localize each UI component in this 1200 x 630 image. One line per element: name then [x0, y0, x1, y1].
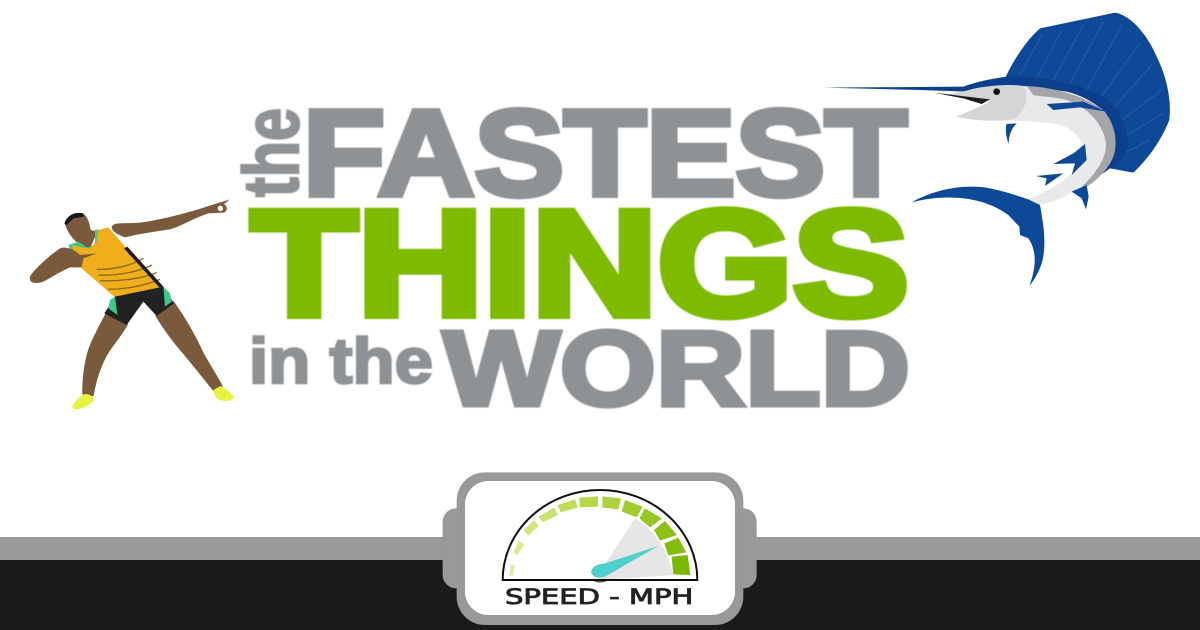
speedometer badge [443, 472, 757, 625]
fish head [943, 85, 1026, 121]
fish fins [1047, 102, 1107, 112]
gauge dial [503, 490, 697, 583]
fish body [1007, 86, 1110, 205]
title word: FASTEST: FASTEST [303, 85, 907, 221]
fish gray stripe [1027, 86, 1116, 192]
fish back band and bill [823, 77, 1128, 177]
fish sail [1005, 13, 1170, 173]
title word: the: the [227, 108, 315, 197]
title word: WORLD: WORLD [443, 310, 910, 428]
gauge needle [591, 546, 658, 578]
badge inner panel [465, 481, 735, 615]
gauge label: SPEED - MPH [505, 585, 693, 610]
footer band [0, 537, 1200, 630]
title word: THINGS: THINGS [251, 179, 909, 347]
badge frame [457, 472, 743, 625]
icon: sprinter [30, 199, 234, 409]
title words: in the: in the [249, 325, 433, 397]
badge side tabs [443, 508, 757, 588]
fish eye [993, 88, 1000, 95]
title [227, 85, 910, 428]
fish mouth [933, 93, 990, 104]
icon: sailfish [823, 13, 1170, 286]
fish tail [912, 187, 1044, 286]
